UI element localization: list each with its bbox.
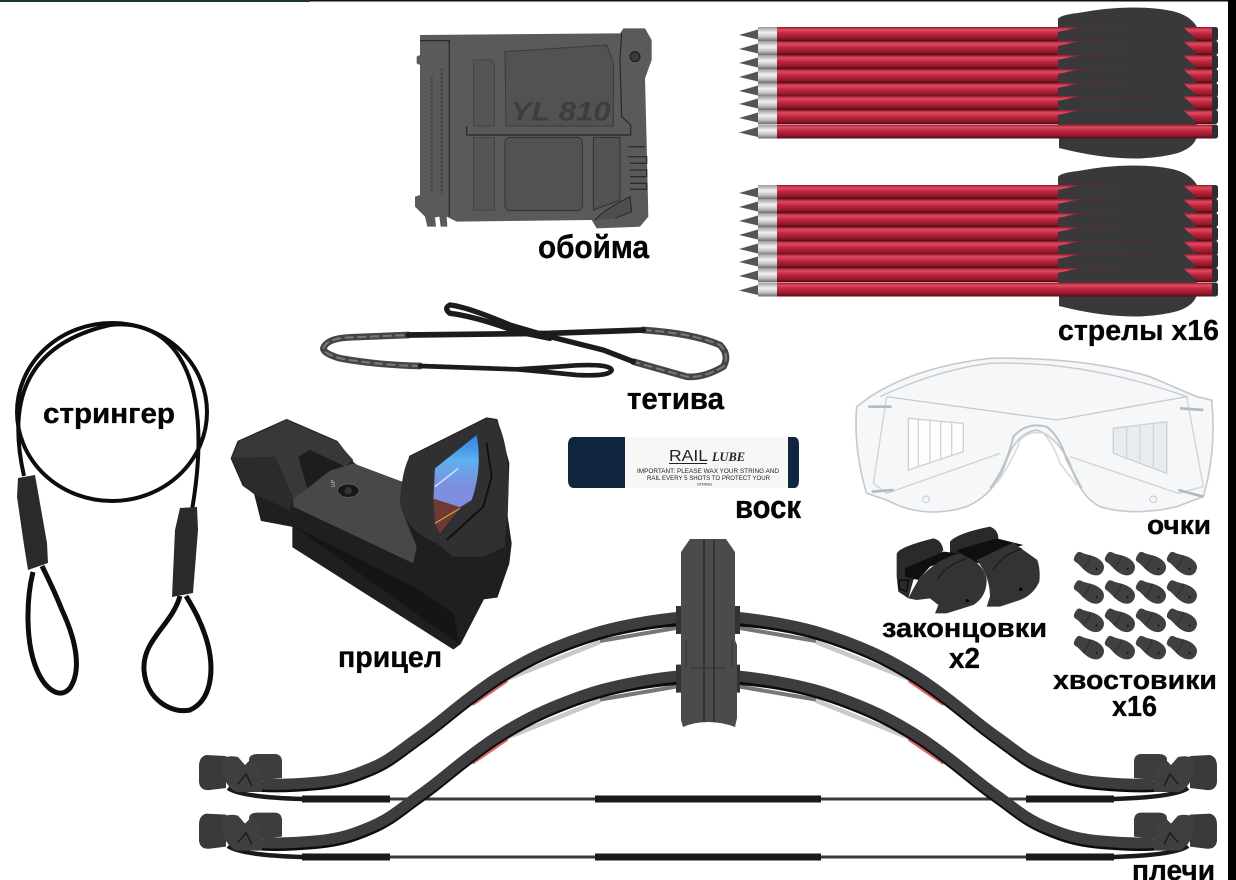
- label: nocks: x16: [1112, 691, 1157, 723]
- label: limb tips: [882, 613, 1047, 675]
- icon: arrows bundle bottom: [739, 165, 1218, 316]
- icon: wax tube: RAIL EVERY 5 SHOTS TO PROTECT YOUR: [647, 475, 770, 482]
- icon: arrows bundle top: [739, 7, 1218, 158]
- icon: magazine: YL 810: [511, 97, 611, 127]
- upper string: [228, 788, 1188, 799]
- icon: wax tube: [568, 437, 799, 488]
- icon: bowstring: [323, 305, 726, 377]
- label: nocks: хвостовики: [1053, 665, 1217, 695]
- label: limb tips: x2: [949, 643, 980, 675]
- icon: wax tube: IMPORTANT: PLEASE WAX YOUR STRING AND: [637, 468, 779, 475]
- icon: bow limbs with strings: [199, 539, 1217, 857]
- lower string: [228, 846, 1188, 857]
- icon: stringer cable: [17, 323, 211, 711]
- icon: safety glasses: [856, 358, 1213, 512]
- icon: nocks x16: [1071, 548, 1200, 663]
- icon: wax tube: STRING: [697, 482, 712, 486]
- icon: red dot sight: [232, 418, 511, 648]
- icon: wax tube: LUBE: [711, 449, 745, 464]
- label: bowstring: тетива: [627, 381, 725, 416]
- label: magazine: обойма: [538, 229, 649, 265]
- label: glasses: очки: [1147, 510, 1211, 540]
- label: limb tips: законцовки: [882, 613, 1047, 643]
- icon: magazine: [415, 28, 652, 228]
- riser: [681, 539, 737, 727]
- lower limb left: [199, 665, 682, 851]
- upper limb right: [734, 606, 1217, 792]
- icon: wax tube: RAIL: [669, 448, 708, 465]
- icon: red dot sight: UP: [331, 479, 337, 487]
- icon: limb tips: [897, 527, 1040, 613]
- label: nocks: [1053, 665, 1217, 723]
- lower limb right: [734, 665, 1217, 851]
- label: arrows: стрелы x16: [1058, 315, 1219, 347]
- label: wax: воск: [735, 489, 802, 525]
- label: sight: прицел: [338, 641, 442, 674]
- label: stringer: стрингер: [43, 398, 175, 430]
- upper limb left: [199, 606, 682, 792]
